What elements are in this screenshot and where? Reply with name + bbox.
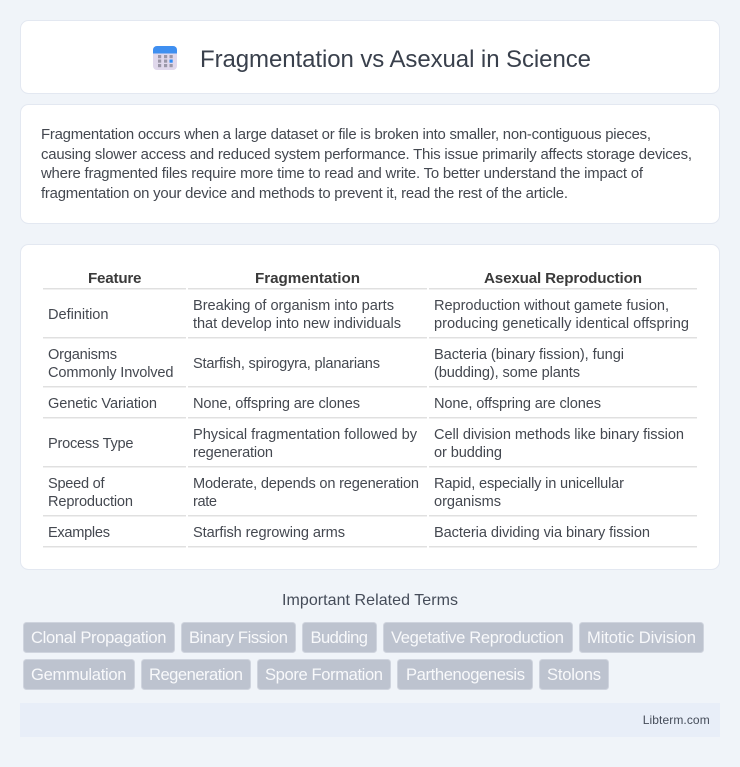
tag: budding [302,622,376,652]
panel: introduction [20,104,720,224]
row: organisms: Bacteria (binary fission), fungi [434,347,624,363]
intro text: Fragmentation occurs when a large dataset or file is broken into smaller, non-contiguous pieces, [41,127,651,143]
table header row [88,270,642,287]
row: speed of reproduction: Reproduction [48,494,133,510]
table header row: Fragmentation [255,270,360,287]
footer [20,703,720,737]
icon: calendar [153,46,177,70]
footer credit: Libterm.com [643,713,710,727]
tag: spore formation [258,660,390,690]
table header row: Feature [88,270,142,287]
row: organisms [48,347,624,381]
panel: header [20,20,720,94]
tag: vegetative reproduction [384,622,572,652]
tag: regeneration: Regeneration [149,665,243,684]
table header row: Asexual Reproduction [484,270,642,287]
intro text: where fragmented files require more time to read and write. To better understand the impact of [40,166,644,182]
row: definition: that develop into new individuals [193,316,401,332]
tag: stolons: Stolons [547,665,601,684]
tag: budding: Budding [310,628,368,647]
tag: mitotic division: Mitotic Division [587,628,696,647]
tag: parthenogenesis: Parthenogenesis [406,665,525,684]
tags: related terms [24,622,704,690]
row: genetic variation: Genetic Variation [48,396,157,412]
row: examples [48,525,650,541]
row: speed of reproduction: Moderate, depends on regeneration [193,476,419,492]
row: speed of reproduction [48,476,624,510]
tag: spore formation: Spore Formation [265,665,383,684]
row: speed of reproduction: Rapid, especially in unicellular [434,476,624,492]
tag: gemmulation [24,660,134,690]
row: definition: Breaking of organism into parts [193,298,394,314]
tag: regeneration [142,660,250,690]
intro text: causing slower access and reduced system performance. This issue primarily affects storage devices, [41,147,692,163]
row: examples: Examples [48,525,110,541]
row: examples: Bacteria dividing via binary fission [434,525,650,541]
tag: stolons [540,660,608,690]
row: speed of reproduction: rate [193,494,217,510]
row: definition: Definition [48,307,108,323]
row: organisms: (budding), some plants [434,365,580,381]
row: process type: Cell division methods like binary fission [434,427,684,443]
row: process type: regeneration [193,445,273,461]
row: definition: Reproduction without gamete fusion, [434,298,669,314]
intro text [40,127,692,202]
intro text: fragmentation on your device and methods to prevent it, read the rest of the article. [41,186,568,202]
row: organisms: Starfish, spirogyra, planarians [193,356,380,372]
row: process type: Physical fragmentation followed by [193,427,418,443]
tag: parthenogenesis [398,660,532,690]
row: organisms: Commonly Involved [48,365,174,381]
panel: comparison table [20,244,720,570]
tag: gemmulation: Gemmulation [31,665,126,684]
tag: binary fission [182,622,296,652]
tag: mitotic division [580,622,704,652]
row: genetic variation [48,396,601,412]
row: definition [48,298,689,332]
tag: vegetative reproduction: Vegetative Reproduction [391,628,564,647]
row: speed of reproduction: organisms [434,494,501,510]
row: definition: producing genetically identical offspring [434,316,689,332]
row: process type: or budding [434,445,502,461]
row: organisms: Organisms [48,347,117,363]
tag: clonal propagation: Clonal Propagation [31,628,166,647]
row: examples: Starfish regrowing arms [193,525,345,541]
row: speed of reproduction: Speed of [48,476,105,492]
row: process type: Process Type [48,436,134,452]
heading: important related terms: Important Related Terms [282,592,458,609]
tag: binary fission: Binary Fission [189,628,288,647]
row: process type [48,427,684,461]
title: Fragmentation vs Asexual in Science [200,46,591,73]
tag: clonal propagation [24,622,174,652]
row: genetic variation: None, offspring are clones [193,396,360,412]
row: genetic variation: None, offspring are clones [434,396,601,412]
